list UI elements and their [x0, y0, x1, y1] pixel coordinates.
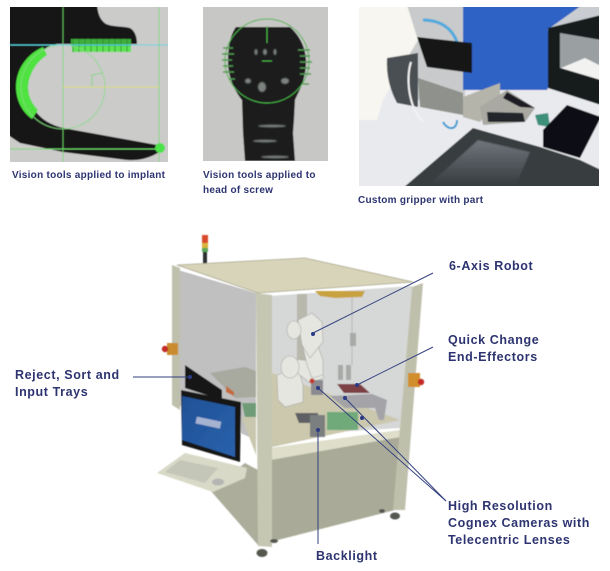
photo: vision tools on implant: [8, 5, 170, 164]
photo: custom gripper with part: [357, 5, 601, 188]
emergency stop: left: [162, 343, 178, 355]
feet: [256, 509, 400, 557]
frame posts: [172, 265, 180, 410]
label: reject, sort and input trays: Input Trays: [15, 385, 88, 399]
keyboard tray: [157, 453, 247, 492]
machine illustration: [157, 235, 424, 557]
robot arm: [277, 313, 324, 407]
input trays: [185, 365, 222, 400]
photo: vision tools on screw head: [201, 5, 330, 163]
caption: screw head: Vision tools applied to: [203, 170, 316, 181]
left lower panel: [210, 463, 258, 545]
deck: [272, 373, 400, 447]
leader lines and markers: [133, 273, 446, 544]
label: backlight: Backlight: [316, 549, 378, 563]
top cover: [177, 258, 413, 293]
rear right glass panel: [270, 286, 412, 436]
label: cognex cameras: Telecentric Lenses: [448, 533, 570, 547]
base front panel: [270, 437, 400, 542]
label: quick change end-effectors: End-Effectors: [448, 350, 538, 364]
tooling on the deck: [330, 394, 387, 420]
label: cognex cameras: Cognex Cameras with: [448, 516, 590, 530]
stack light: [202, 235, 208, 267]
caption: implant: Vision tools applied to implant: [12, 170, 166, 181]
label: 6-axis robot: 6-Axis Robot: [449, 259, 534, 273]
caption: screw head: head of screw: [203, 185, 273, 196]
label: quick change end-effectors: Quick Change: [448, 333, 539, 347]
label: cognex cameras: High Resolution: [448, 499, 553, 513]
emergency stop: right: [408, 373, 424, 387]
touch-screen monitor: [181, 390, 241, 462]
label: reject, sort and input trays: Reject, Sort and: [15, 368, 120, 382]
rear left glass panel: [178, 270, 256, 440]
caption: custom gripper: Custom gripper with part: [358, 195, 484, 206]
